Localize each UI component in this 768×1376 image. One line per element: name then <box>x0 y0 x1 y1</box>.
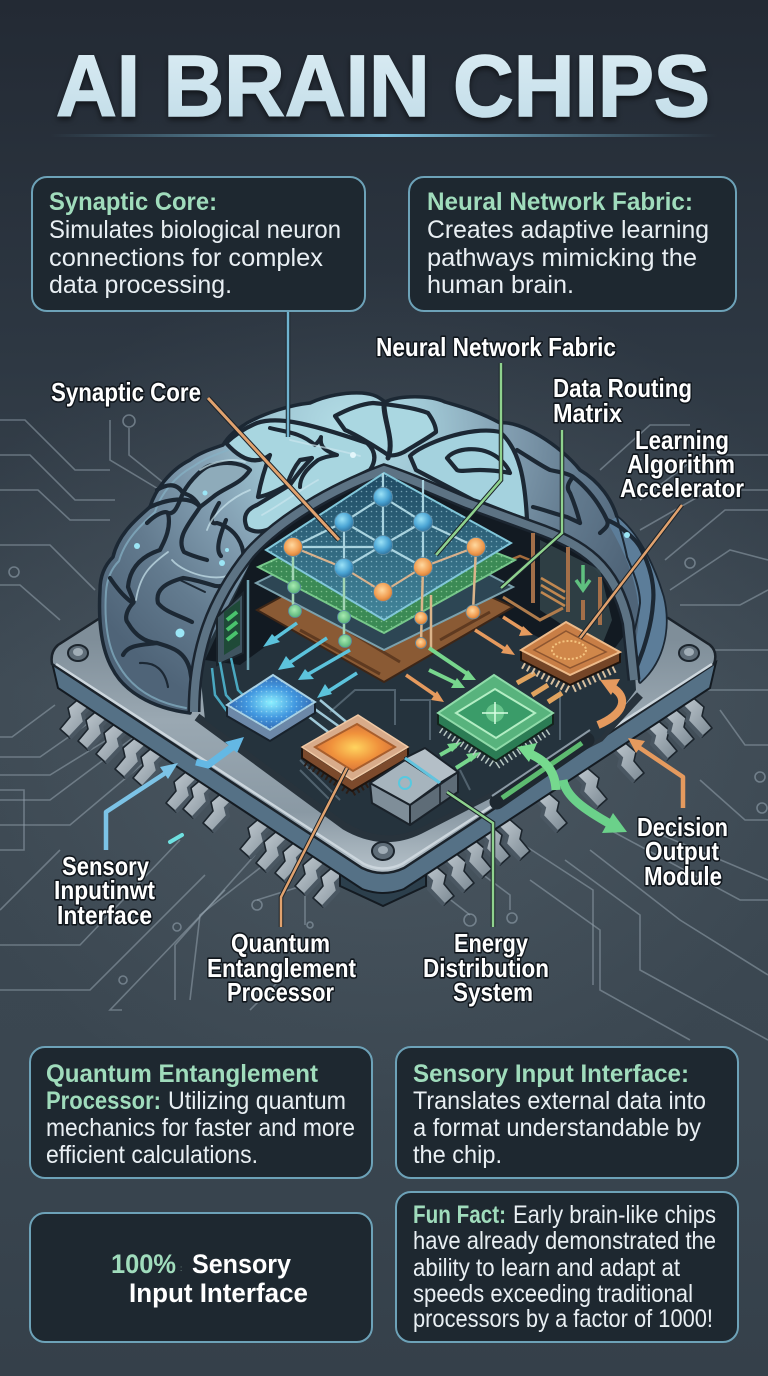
blue sensory chip <box>227 675 350 741</box>
label: data routing matrix: Data Routing <box>553 373 692 403</box>
internal data flow arrows blue <box>212 623 357 718</box>
floor circuit lines <box>300 690 560 800</box>
leader: neural network fabric <box>436 363 501 555</box>
body text: Translates external data into <box>413 1087 706 1115</box>
chip interior <box>194 470 636 835</box>
label: energy distribution system: Energy <box>454 928 528 958</box>
label: sensory input interface: Sensory <box>62 851 149 881</box>
body text: Simulates biological neuron <box>49 216 341 244</box>
heading: Synaptic Core: <box>49 188 217 216</box>
label: synaptic core: Synaptic Core <box>51 377 201 407</box>
outer rim highlight <box>106 450 228 708</box>
leader: data routing matrix <box>501 430 562 588</box>
body text: efficient calculations. <box>46 1141 258 1169</box>
body text: Utilizing quantum <box>168 1087 346 1115</box>
label: learning algorithm accelerator: Learning <box>635 425 729 455</box>
arrow into sensory chip <box>196 737 244 765</box>
arrow from sensory interface <box>106 763 178 850</box>
label: sensory input interface: Inputinwt <box>54 875 155 905</box>
green layer <box>258 510 515 633</box>
heading: Sensory Input Interface: <box>413 1060 689 1088</box>
panel: quantum entanglement processor <box>30 1047 372 1178</box>
title divider <box>50 134 718 137</box>
label: data routing matrix <box>553 373 692 428</box>
green arrow toward decision output <box>563 780 627 833</box>
body text: a format understandable by <box>413 1114 701 1142</box>
panel: fun fact <box>396 1192 738 1342</box>
label: decision output module: Output <box>645 836 719 866</box>
heading: Processor: <box>46 1087 161 1115</box>
screw bottom <box>372 842 394 860</box>
stat label <box>129 1249 308 1308</box>
orange accelerator chip <box>517 622 620 702</box>
body text <box>46 1087 355 1169</box>
label: energy distribution system <box>423 928 549 1007</box>
stat value: 100% <box>111 1249 176 1279</box>
stat label: Sensory <box>192 1249 291 1279</box>
neural node network <box>284 473 486 650</box>
panel: synaptic core <box>32 177 365 311</box>
memory layer <box>256 520 513 650</box>
body text <box>49 216 341 299</box>
body text: connections for complex <box>49 244 323 272</box>
label: sensory input interface <box>54 851 155 930</box>
back wall details <box>217 533 612 670</box>
screw right <box>679 645 699 661</box>
title: AI BRAIN CHIPS <box>56 38 710 135</box>
label: decision output module: Decision <box>637 812 728 842</box>
heading: Quantum Entanglement <box>46 1060 319 1088</box>
circuit traces background <box>0 415 768 1040</box>
body text <box>427 216 709 299</box>
body text: pathways mimicking the <box>427 244 697 272</box>
internal data flow arrows orange <box>406 617 533 702</box>
label: learning algorithm accelerator <box>620 425 744 503</box>
body text: ability to learn and adapt at <box>413 1254 680 1282</box>
label: quantum entanglement processor: Entanglement <box>207 953 356 983</box>
label: learning algorithm accelerator: Algorithm <box>627 449 735 479</box>
label: decision output module <box>637 812 728 891</box>
left lobe folds <box>110 460 250 687</box>
label: quantum entanglement processor <box>207 928 356 1007</box>
curved orange arrow <box>598 679 622 725</box>
leader: energy distribution system <box>447 792 493 927</box>
leader: synaptic core <box>208 398 339 540</box>
copper layer <box>257 592 513 682</box>
body text: processors by a factor of 1000! <box>413 1305 713 1333</box>
label: energy distribution system: Distribution <box>423 953 549 983</box>
stat separator: : <box>180 1264 182 1273</box>
heading: Neural Network Fabric: <box>427 188 693 216</box>
label: energy distribution system: System <box>453 977 533 1007</box>
screw left <box>68 645 88 661</box>
body text: have already demonstrated the <box>413 1227 716 1255</box>
body text <box>413 1087 706 1169</box>
arrow from decision module <box>628 738 683 808</box>
glowing trace accent <box>170 835 182 842</box>
heading <box>46 1060 319 1115</box>
stat label: Input Interface <box>129 1278 308 1308</box>
energy distribution module <box>370 748 458 825</box>
label: decision output module: Module <box>644 861 722 891</box>
body text: Early brain-like chips <box>513 1201 716 1229</box>
panel: statistic <box>30 1213 372 1342</box>
green learning chip <box>438 675 553 764</box>
panel: neural network fabric <box>409 177 736 311</box>
body text: the chip. <box>413 1141 502 1169</box>
label: learning algorithm accelerator: Accelerator <box>620 473 744 503</box>
curved green arrow into chip <box>517 743 556 790</box>
top folds <box>226 402 653 677</box>
heading: Fun Fact: <box>413 1201 506 1229</box>
leader: quantum entanglement processor <box>281 768 347 927</box>
label: quantum entanglement processor: Quantum <box>231 928 330 958</box>
brain sparkles <box>134 490 630 638</box>
green power channel <box>492 730 590 802</box>
body text: Creates adaptive learning <box>427 216 709 244</box>
label: sensory input interface: Interface <box>57 900 152 930</box>
right lobe shading <box>607 517 666 682</box>
body text: human brain. <box>427 271 574 299</box>
chip base plate <box>52 618 716 906</box>
label: data routing matrix: Matrix <box>553 398 622 428</box>
body text: speeds exceeding traditional <box>413 1280 693 1308</box>
brain dome <box>100 393 666 713</box>
leader: learning algorithm accelerator <box>580 505 682 638</box>
leader: panel connector <box>286 311 290 437</box>
label: neural network fabric: Neural Network Fabric <box>376 332 616 362</box>
processor pins <box>60 689 712 907</box>
quantum entanglement chip <box>302 715 408 792</box>
label: quantum entanglement processor: Processor <box>227 977 334 1007</box>
panel: sensory input interface <box>396 1047 738 1178</box>
body text: mechanics for faster and more <box>46 1114 355 1142</box>
blue neural layer <box>266 473 511 620</box>
body text: data processing. <box>49 271 232 299</box>
body text <box>413 1201 716 1333</box>
internal data flow arrows green <box>429 648 481 768</box>
